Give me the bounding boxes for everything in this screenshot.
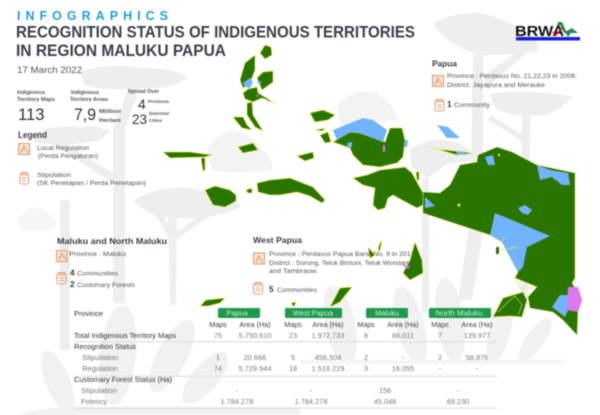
row: total: 1.972.733 — [312, 331, 344, 340]
column headers: Maps — [209, 320, 227, 329]
stat: spread over: Cities — [149, 118, 163, 123]
panel: Maluku and North Maluku: 4 — [70, 268, 75, 278]
small southern islands — [200, 287, 352, 307]
panel: Papua: District: Jayapura and Merauke — [447, 82, 545, 89]
stat: spread over: Spread Over — [128, 89, 160, 95]
eyebrow: INFOGRAPHICS — [17, 9, 168, 23]
panel: Papua: Province : Perdasus No. 21,22,23 in 2008. — [447, 73, 577, 80]
header: Papua — [218, 308, 260, 318]
column headers — [209, 320, 493, 329]
row: stipulation: Stipulation — [82, 353, 118, 362]
legend item: local regulation — [37, 145, 98, 160]
column headers: Maps — [357, 320, 375, 329]
header: West Papua — [285, 308, 342, 318]
stat: territory maps: 113 — [18, 105, 44, 124]
header: North Maluku — [429, 308, 491, 318]
row: stipulation: - — [402, 353, 405, 362]
title: RECOGNITION STATUS OF INDIGENOUS TERRITORIES — [16, 24, 415, 42]
row: stipulation: 20.666 — [244, 353, 266, 362]
panel: Maluku and North Maluku: Communities — [77, 270, 119, 278]
stat: spread over — [128, 89, 170, 127]
row: total: 86.011 — [392, 331, 414, 340]
panel: Maluku and North Maluku: 2 — [70, 279, 75, 289]
icon: stipulation — [20, 172, 28, 184]
row: regulation: 3 — [364, 364, 368, 373]
header: North Maluku: North Maluku — [436, 308, 482, 318]
panel: West Papua: District : Sorong, Teluk Bintuni, Teluk Wondama — [269, 260, 414, 267]
row: total: 139.977 — [464, 331, 490, 340]
row: total: 5.750.610 — [239, 331, 271, 340]
row: stipulation: 456.504 — [315, 353, 341, 362]
row: customary forest status: Customary Forest Status (Ha) — [74, 375, 172, 384]
stat: territory maps: Territory Maps — [17, 97, 55, 103]
icon: local regulation — [18, 144, 30, 154]
row: potency: Potency — [81, 397, 107, 406]
Raja Ampat islands — [310, 110, 335, 143]
column headers: Area (Ha) — [461, 320, 493, 329]
yellow zones — [500, 237, 518, 250]
row: potency: 45.048 — [374, 397, 396, 406]
panel: West Papua: Communities — [277, 287, 318, 294]
row: total: 8 — [364, 331, 368, 340]
column headers: Area (Ha) — [312, 320, 344, 329]
row: regulation: - — [476, 364, 479, 373]
row: regulation: 5.729.944 — [239, 364, 271, 373]
row: forest stipulation: - — [236, 386, 239, 395]
column headers: Area (Ha) — [387, 320, 419, 329]
title — [16, 24, 415, 60]
row: total: 23 — [289, 331, 297, 340]
row: recognition status: Recognition Status — [74, 342, 136, 351]
panel: West Papua: and Tambrauw. — [269, 268, 318, 275]
legend item: stipulation: Stipulation — [37, 172, 71, 179]
Maluku islands — [205, 178, 325, 207]
Papua mainland — [423, 147, 582, 335]
Bird's Head peninsula — [333, 128, 405, 167]
stat: territory areas: Million — [99, 109, 122, 115]
stat: territory areas: Indigenous — [71, 90, 99, 96]
row: potency: 1.784.278 — [221, 397, 253, 406]
stat: spread over: Provinces — [148, 99, 169, 104]
row: forest stipulation — [81, 386, 460, 395]
row: forest stipulation: Stipulation — [81, 386, 117, 395]
province column label: Province — [74, 309, 103, 318]
legend item: stipulation: (SK Penetapan / Perda Penetapan) — [37, 180, 146, 187]
row: stipulation: 1 — [216, 353, 220, 362]
panel: Papua — [432, 59, 577, 111]
panel: Maluku and North Maluku: Maluku and North Maluku — [57, 236, 167, 246]
panel: Papua: Papua — [432, 59, 457, 69]
title: IN REGION MALUKU PAPUA — [16, 42, 226, 60]
row: total: 75 — [214, 331, 222, 340]
row: total — [74, 331, 490, 340]
panel: West Papua: West Papua — [253, 235, 302, 245]
row: forest stipulation: - — [457, 386, 460, 395]
Biak and Yapen islands — [430, 125, 473, 155]
row: regulation: - — [439, 364, 442, 373]
row: stipulation: 2 — [364, 353, 368, 362]
row: regulation — [82, 364, 479, 373]
table row lines — [74, 341, 497, 409]
row: stipulation: 2 — [438, 353, 442, 362]
panel: West Papua: 5 — [269, 284, 274, 294]
header: West Papua: West Papua — [293, 308, 334, 318]
map: Maluku and Papua islands — [163, 45, 582, 335]
background tree silhouettes — [17, 13, 573, 350]
panel: Papua: 1 — [447, 99, 452, 109]
lakes and blue zones — [425, 155, 570, 317]
header: Papua: Papua — [226, 308, 249, 318]
row: forest stipulation: 158 — [379, 386, 391, 395]
stat: spread over: Districts/ — [149, 111, 170, 116]
row: stipulation: 5 — [291, 353, 295, 362]
panel: Maluku and North Maluku — [56, 236, 167, 289]
pink zone — [567, 287, 582, 312]
logo: BRWA: BRWA — [515, 24, 565, 40]
stat: territory areas: Territory Areas — [70, 97, 108, 103]
row: total: Total Indigenous Territory Maps — [74, 331, 176, 340]
row: forest stipulation: - — [310, 386, 313, 395]
background plant leaves — [18, 276, 570, 415]
panel: Papua: Community — [454, 102, 491, 109]
column headers: Area (Ha) — [239, 320, 271, 329]
Frederik Hendrik island — [493, 292, 527, 317]
column headers: Maps — [284, 320, 302, 329]
row: stipulation — [82, 353, 488, 362]
row: regulation: 1.516.229 — [312, 364, 344, 373]
column headers: Maps — [431, 320, 449, 329]
Bomberai peninsula — [353, 167, 423, 210]
panel: Maluku and North Maluku: Customary Forests — [77, 282, 136, 289]
date: 17 March 2022 — [17, 65, 82, 75]
row: regulation: 18 — [289, 364, 297, 373]
legend item: local regulation: (Perda Pengaturan) — [38, 153, 98, 160]
row: potency: 1.784.278 — [295, 397, 327, 406]
stat: territory areas — [70, 90, 122, 124]
stat: territory maps: Indigenous — [17, 90, 45, 96]
row: regulation: 74 — [214, 364, 222, 373]
legend item: local regulation: Local Regulation — [37, 145, 89, 152]
stat: spread over: 4 — [138, 96, 146, 112]
header: Maluku — [366, 308, 408, 318]
row: total: 7 — [438, 331, 442, 340]
logo: BRWA — [515, 22, 580, 40]
North Maluku islands — [163, 45, 314, 171]
row: regulation: 16.055 — [392, 364, 414, 373]
Aru and Tanimbar islands — [368, 240, 423, 280]
legend item: stipulation — [37, 172, 146, 187]
panel: West Papua: Province : Perdasus Papua Barat No. 9 in 2011. — [269, 251, 416, 258]
panel: West Papua — [253, 235, 416, 294]
stat: territory maps — [17, 90, 55, 124]
row: stipulation: 58.876 — [466, 353, 488, 362]
legend — [18, 130, 146, 187]
data table — [74, 308, 497, 409]
row: potency — [81, 397, 469, 406]
row: potency: 69.230 — [447, 397, 469, 406]
legend heading: Legend — [18, 130, 47, 140]
header: Maluku: Maluku — [375, 308, 399, 318]
row: regulation: Regulation — [82, 364, 118, 373]
stat: spread over: 23 — [132, 111, 147, 127]
panel: Maluku and North Maluku: Province : Maluku — [69, 251, 126, 258]
stat: territory areas: 7,9 — [74, 105, 96, 124]
stat: territory areas: Hectare — [99, 118, 122, 124]
